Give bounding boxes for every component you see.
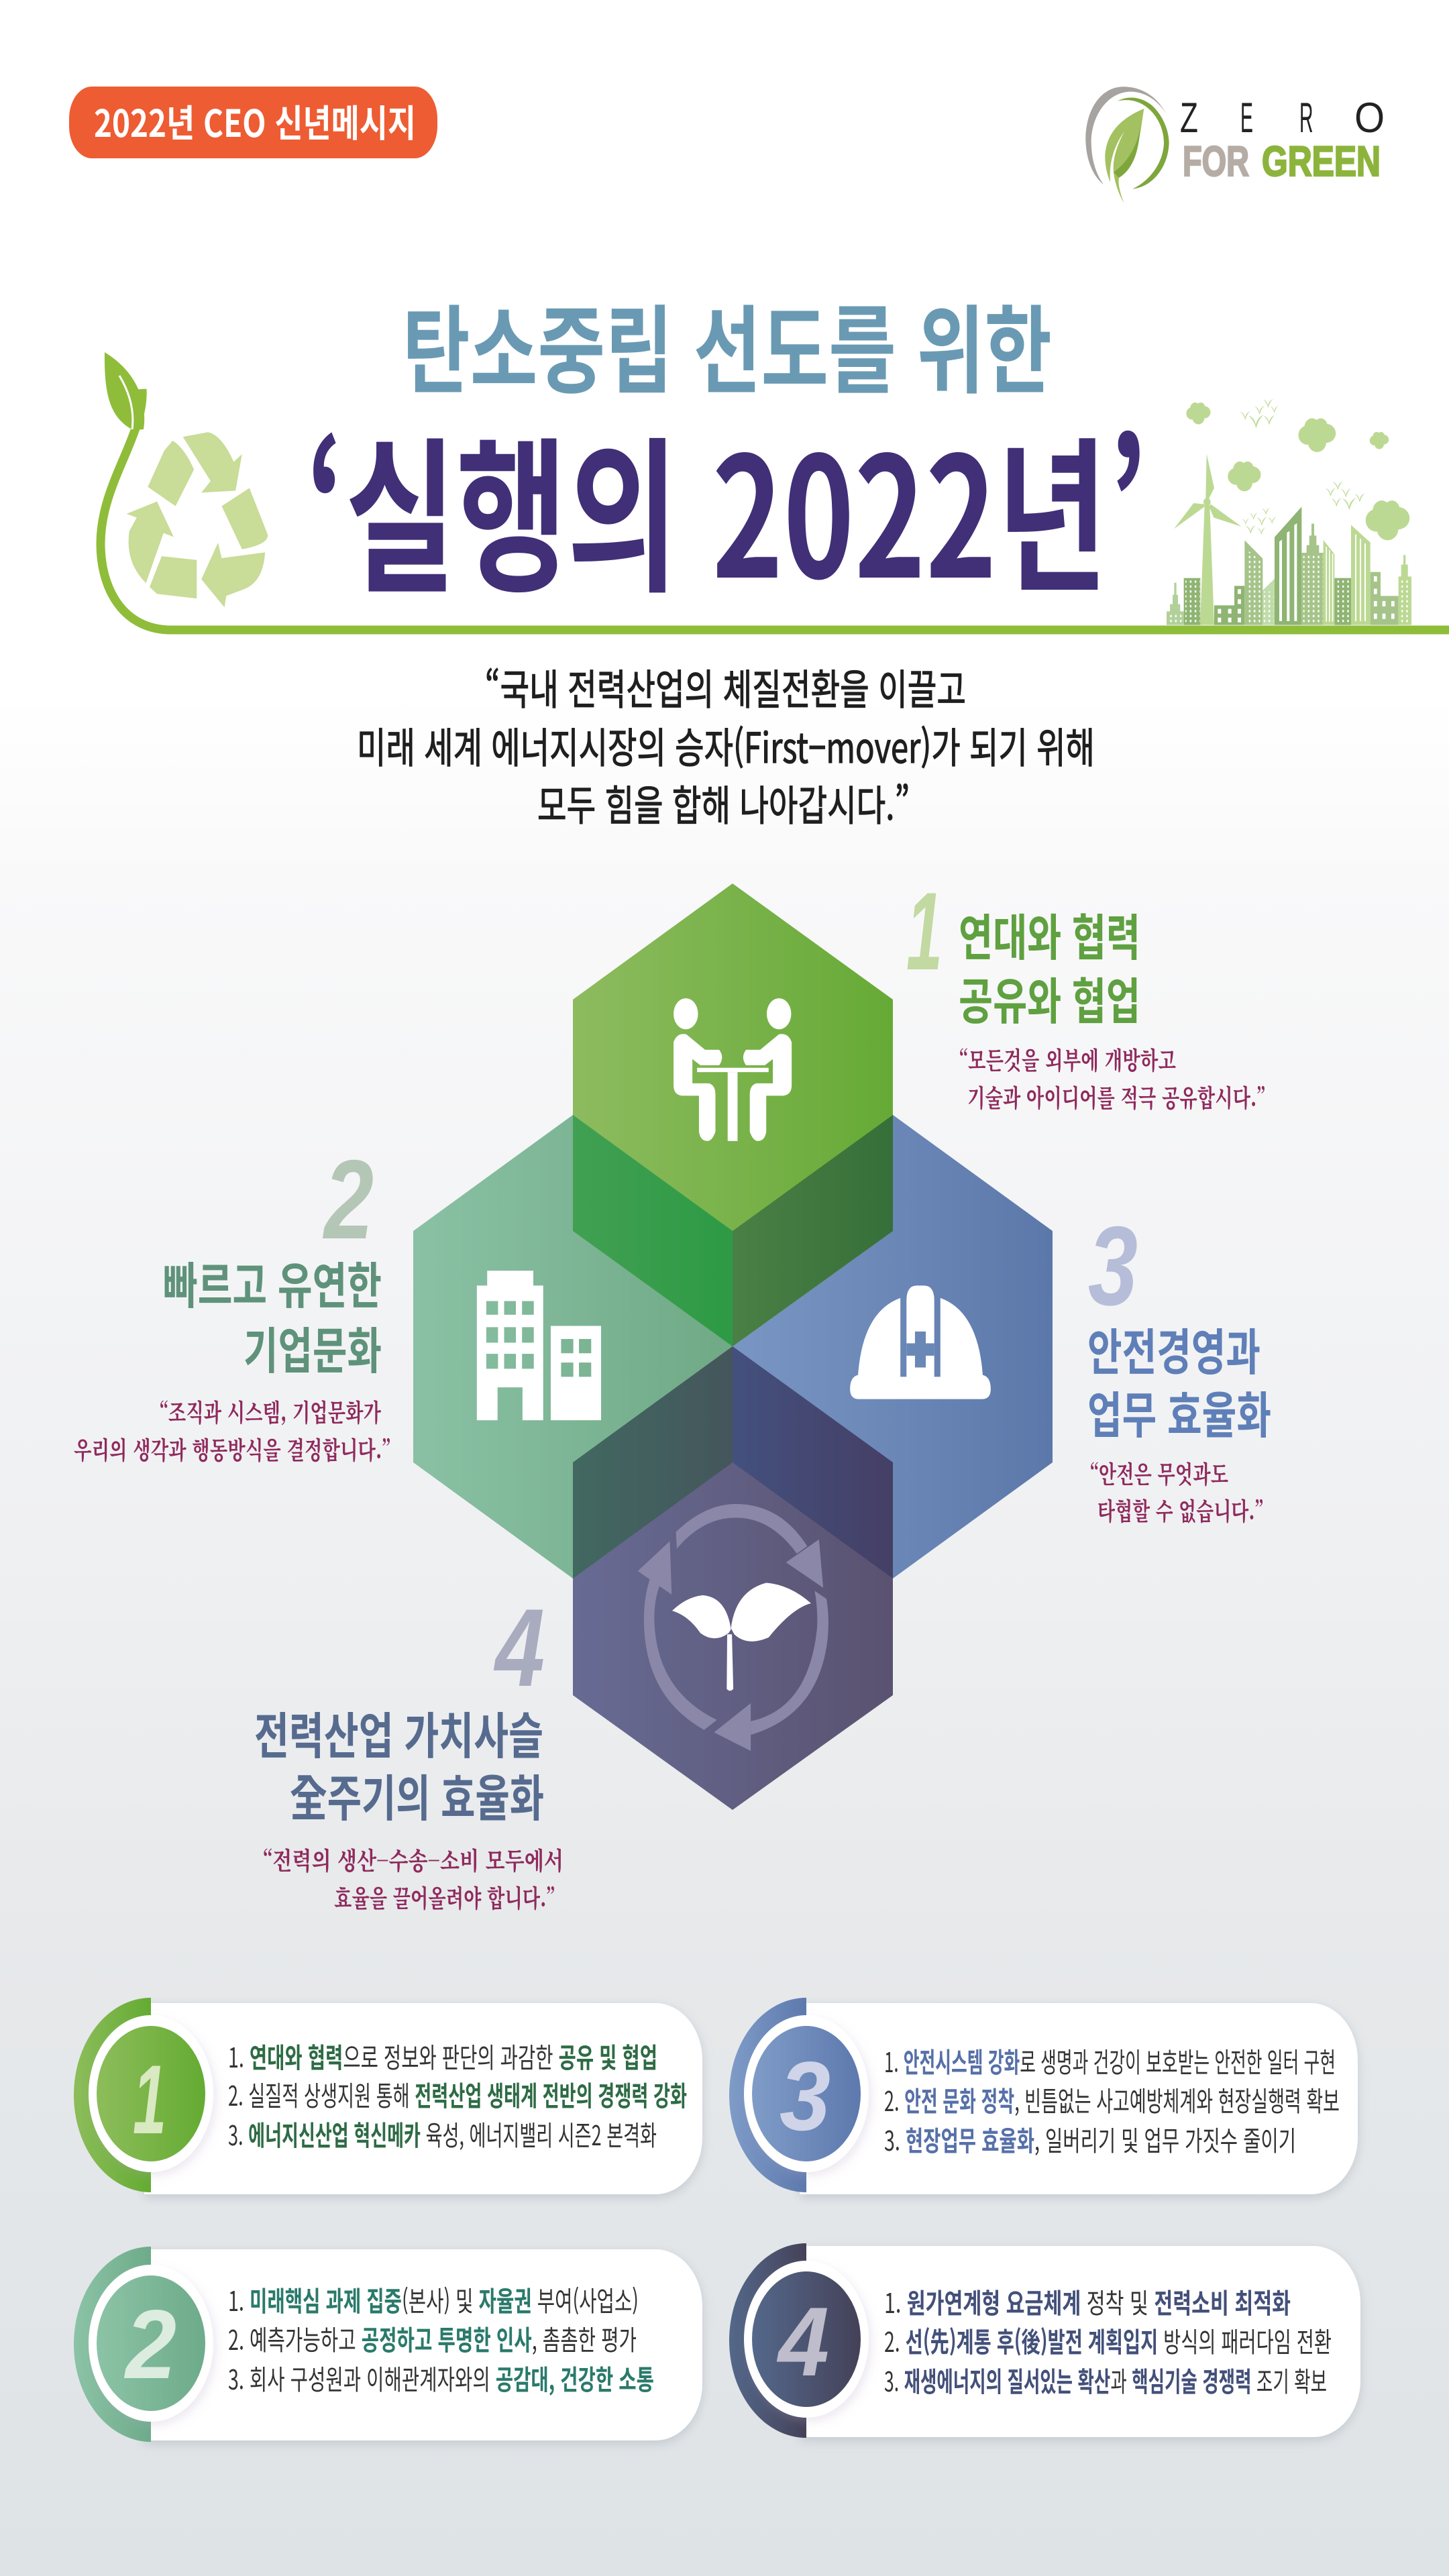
hexagon 2: green-teal [413,1115,733,1578]
section 2 label [74,1136,391,1466]
quote 1 [959,1040,1266,1114]
heading 2 [163,1246,382,1383]
card 3 text: 3. 현장업무 효율화, 일버리기 및 업무 가짓수 줄이기 [884,2118,1296,2159]
card 2 crescent [74,2247,151,2442]
title line 1: 탄소중립 선도를 위한 [402,274,1052,413]
wind turbine [1174,454,1242,625]
logo word: ZERO: O [1354,94,1385,142]
card 4 number badge: 4 [776,2287,829,2396]
main quote: 미래 세계 에너지시장의 승자(First−mover)가 되기 위해 [357,714,1095,775]
quote 3: “안전은 무엇과도 [1089,1454,1228,1491]
card 2 number badge: 2 [123,2290,176,2399]
hexagon 1: green [573,883,893,1346]
card 1 [74,1998,702,2194]
logo word: ZERO [1180,94,1385,142]
card 4 panel [800,2246,1360,2437]
logo mark: leaf and swoosh [1085,87,1169,203]
card 1 text: 2. 실질적 상생지원 통해 전력산업 생태계 전반의 경쟁력 강화 [228,2074,687,2114]
card 3 number badge [744,2015,869,2172]
icon: sprout in recycling arrows [638,1504,828,1751]
quote 2: “조직과 시스템, 기업문화가 [159,1393,381,1429]
card 1 number badge [89,2015,213,2172]
card 4 text: 1. 원가연계형 요금체계 정착 및 전력소비 최적화 [884,2281,1291,2321]
card 3 [729,1998,1358,2194]
card 4 [729,2243,1360,2438]
illustration: green stem baseline with leaf [101,352,1449,630]
card 2 [74,2247,702,2442]
card 1 text: 1. 연대와 협력으로 정보와 판단의 과감한 공유 및 협업 [228,2035,657,2076]
hexagon 4: purple [573,1346,893,1810]
quote 4 [262,1841,564,1915]
heading 4: 전력산업 가치사슬 [254,1697,543,1768]
card 4 crescent [729,2243,806,2438]
clouds [1186,402,1409,540]
card 4 text: 2. 선(先)계통 후(後)발전 계획입지 방식의 패러다임 전환 [884,2320,1332,2360]
number 3: 3 [1088,1203,1138,1329]
heading 2: 기업문화 [244,1311,382,1383]
overlap: hex 2 and 4 [573,1346,733,1578]
card 1 panel [144,2003,702,2194]
card 2 text [228,2279,654,2398]
logo: Zero for Green [1085,87,1385,203]
card 3 number badge: 3 [780,2041,830,2151]
quote 3: 타협할 수 없습니다.” [1097,1491,1264,1527]
quote 4: 효율을 끌어올려야 합니다.” [334,1878,555,1915]
card 2 panel [144,2249,702,2440]
quote 1: 기술과 아이디어를 적극 공유합시다.” [967,1078,1266,1114]
card 1 number badge: 1 [133,2045,166,2154]
icon: recycle symbol [127,432,268,607]
illustration: green city with wind turbine [1167,399,1411,625]
heading 1: 연대와 협력 [959,898,1140,970]
logo word: ZERO: R [1299,95,1313,142]
card 3 crescent [729,1998,806,2192]
badge: 2022 CEO message: 2022년 CEO 신년메시지 [94,94,416,148]
title line 2: ‘실행의 2022년’ [306,385,1147,626]
heading 2: 빠르고 유연한 [163,1246,382,1318]
heading 4: 全주기의 효율화 [290,1759,544,1831]
card 3 panel [800,2003,1358,2194]
card 4 text: 3. 재생에너지의 질서있는 확산과 핵심기술 경쟁력 조기 확보 [884,2359,1327,2400]
overlap: hex 3 and 4 [733,1346,893,1578]
card 3 text [884,2040,1340,2159]
heading 3 [1087,1313,1271,1448]
quote 3 [1089,1454,1264,1527]
card 1 crescent [74,1998,151,2192]
logo word: FOR GREEN [1183,138,1381,185]
quote 4: “전력의 생산−수송−소비 모두에서 [262,1841,564,1877]
heading 1 [959,898,1140,1034]
main quote: 모두 힘을 합해 나아갑시다.” [537,772,910,833]
icon: office buildings [477,1271,601,1420]
logo word: ZERO: Z [1180,94,1198,142]
card 1 text: 3. 에너지신산업 혁신메카 육성, 에너지밸리 시즌2 본격화 [228,2113,657,2153]
icon: two people at table [674,998,792,1141]
icon: safety helmet [850,1285,991,1399]
main quote [357,656,1095,833]
quote 1: “모든것을 외부에 개방하고 [959,1040,1176,1077]
number 1: 1 [906,869,943,993]
heading 4 [254,1697,544,1831]
number 4: 4 [494,1586,545,1709]
card 4 text [884,2281,1332,2400]
overlap: hex 1 and 2 [573,1115,733,1346]
heading 3: 안전경영과 [1087,1313,1260,1385]
buildings [1167,506,1411,625]
logo word: FOR GREEN: GREEN [1262,138,1381,185]
hexagon diagram [413,883,1053,1810]
overlap: hex 1 and 3 [733,1115,893,1346]
main quote: “국내 전력산업의 체질전환을 이끌고 [485,656,966,716]
badge: 2022 CEO message [69,87,437,158]
card 2 text: 1. 미래핵심 과제 집중(본사) 및 자율권 부여(사업소) [228,2279,639,2319]
heading 1: 공유와 협업 [959,962,1140,1034]
card 2 text: 2. 예측가능하고 공정하고 투명한 인사, 촘촘한 평가 [228,2318,637,2358]
section 1 label [906,869,1266,1114]
birds [1240,399,1365,535]
heading 3: 업무 효율화 [1087,1376,1271,1448]
card 2 text: 3. 회사 구성원과 이해관계자와의 공감대, 건강한 소통 [228,2357,654,2398]
hexagon 3: blue [733,1115,1053,1578]
quote 2 [74,1393,391,1466]
card 1 text [228,2035,687,2153]
section 4 label [254,1586,564,1915]
section 3 label [1087,1203,1271,1527]
quote 2: 우리의 생각과 행동방식을 결정합니다.” [74,1430,391,1466]
number 2: 2 [323,1136,374,1263]
card 4 number badge [744,2261,869,2418]
logo word: ZERO: E [1240,95,1253,142]
card 2 number badge [89,2265,213,2422]
logo word: FOR GREEN: FOR [1183,138,1249,185]
